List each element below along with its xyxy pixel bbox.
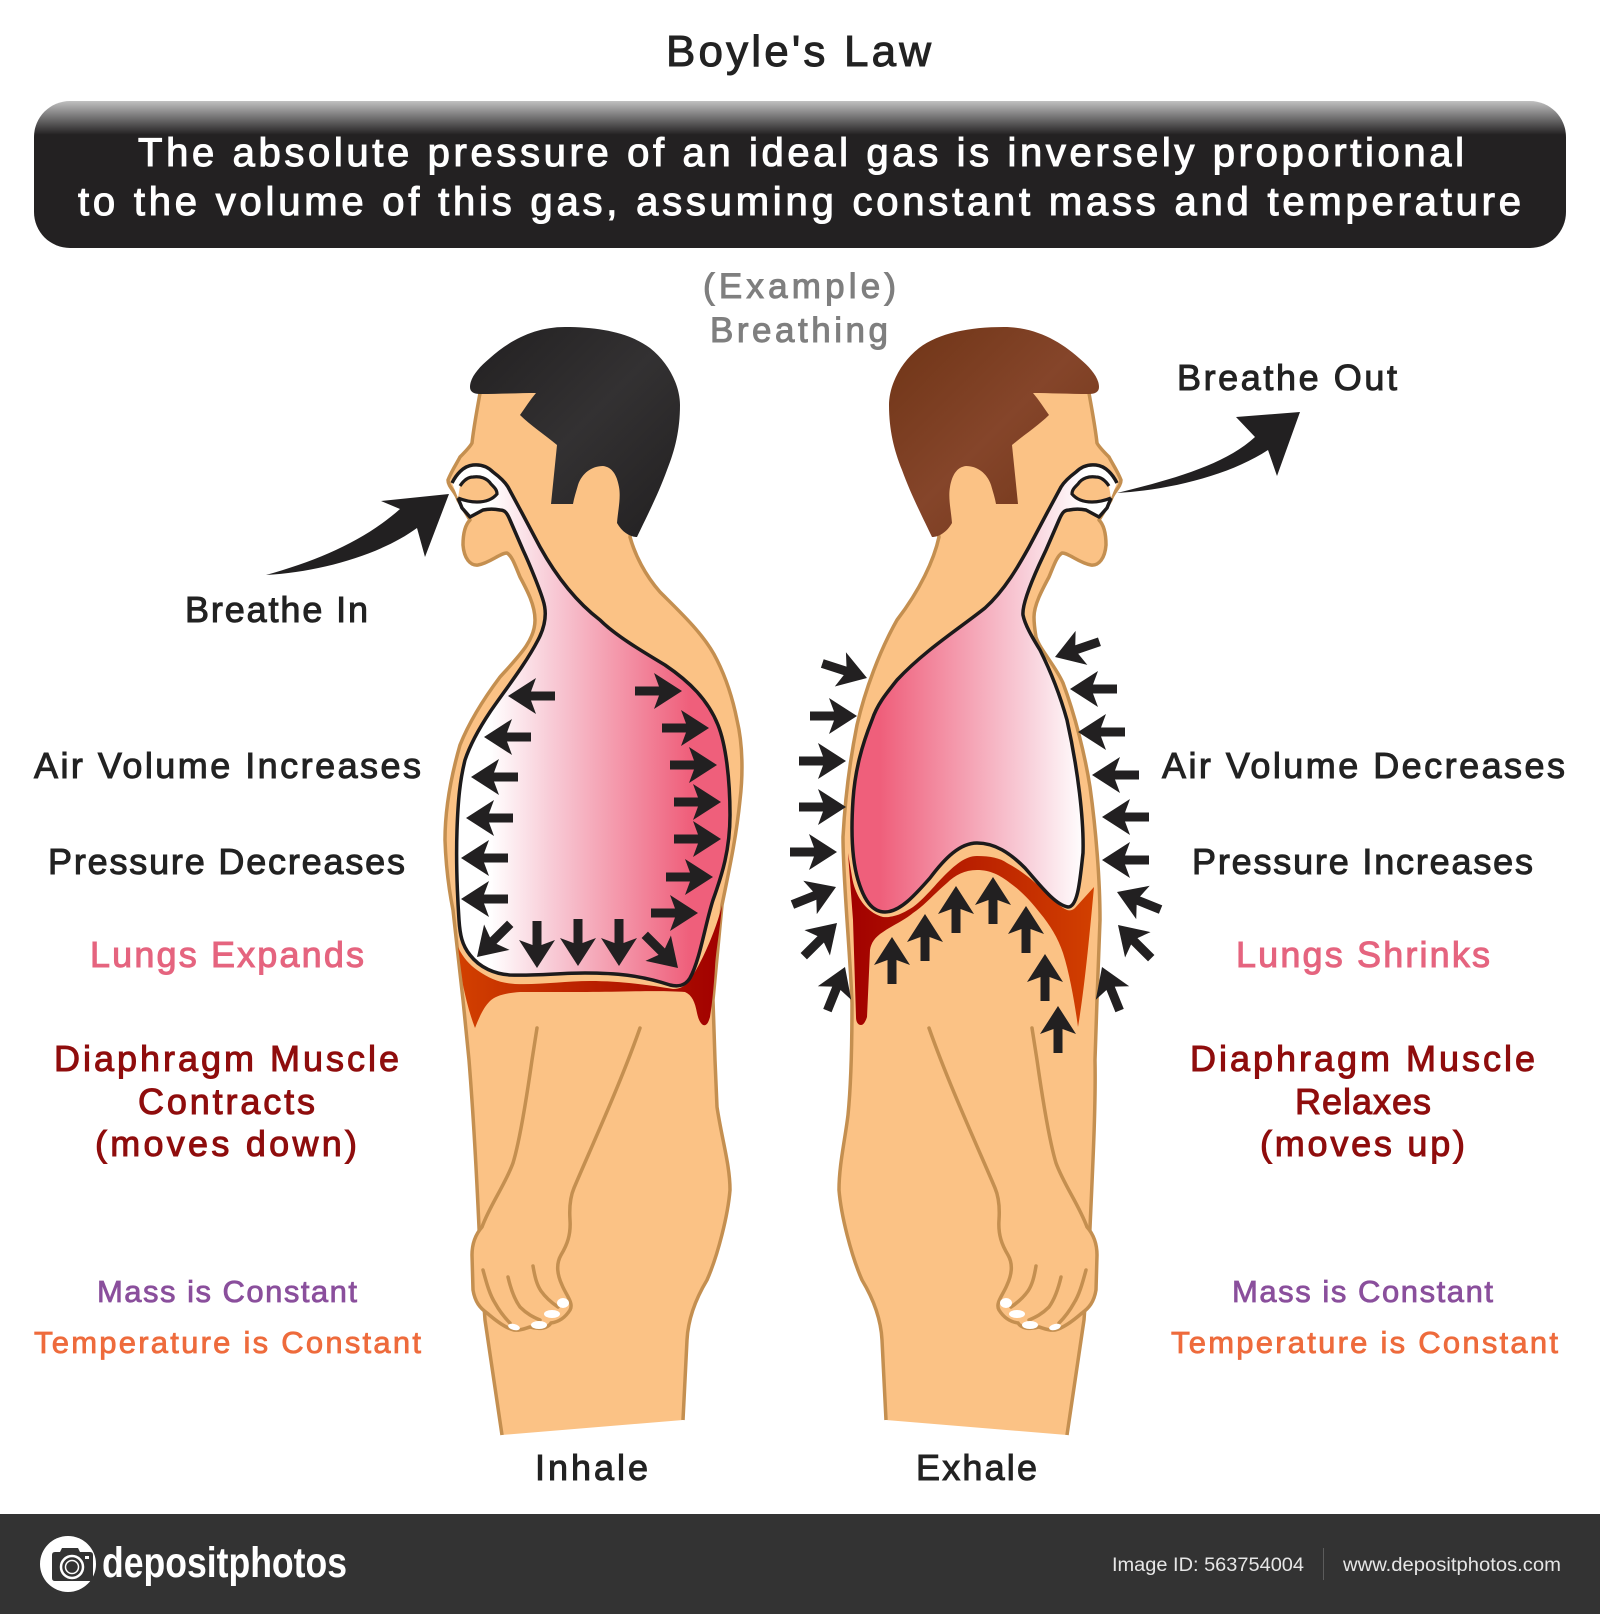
exhale captions (1162, 745, 1565, 1360)
footer logo icon (40, 1536, 96, 1592)
label: breathe out: Breathe Out (1177, 357, 1397, 398)
label: inhale: Inhale (535, 1447, 648, 1488)
left lung and airway (452, 465, 730, 986)
right hair (889, 327, 1099, 537)
exhale captions: Mass is Constant (1232, 1274, 1493, 1309)
exhale captions: Diaphragm Muscle (1190, 1038, 1535, 1079)
inhale captions: Mass is Constant (97, 1274, 357, 1309)
label: exhale: Exhale (916, 1447, 1037, 1488)
website: www.depositphotos.com (1342, 1555, 1561, 1576)
inhale captions: (moves down) (95, 1123, 357, 1164)
exhale captions: Temperature is Constant (1171, 1325, 1558, 1360)
subtitle: example breathing: Breathing (710, 311, 888, 350)
compression arrows (786, 625, 1167, 1053)
figure: inhale (445, 327, 742, 1435)
left body outline (445, 350, 742, 1435)
subtitle: example breathing: (Example) (703, 267, 896, 306)
right body outline (839, 350, 1121, 1435)
footer bar (0, 1514, 1600, 1614)
right arm and hand (929, 1028, 1097, 1331)
definition banner (34, 101, 1566, 248)
right lung and airway (852, 465, 1117, 912)
arrow: breathe in (266, 494, 449, 575)
inhale captions: Lungs Expands (90, 934, 364, 975)
left mouth detail (458, 477, 497, 502)
inhale captions: Air Volume Increases (34, 745, 421, 786)
inhale captions: Pressure Decreases (48, 841, 405, 882)
label: breathe in: Breathe In (185, 589, 368, 630)
left arm and hand (472, 1028, 640, 1331)
title: Boyle's Law (666, 27, 931, 76)
inhale captions: Diaphragm Muscle (54, 1038, 399, 1079)
exhale captions: Lungs Shrinks (1236, 934, 1490, 975)
exhale captions: (moves up) (1260, 1123, 1465, 1164)
inhale captions: Temperature is Constant (34, 1325, 421, 1360)
left diaphragm (458, 905, 722, 1028)
right diaphragm (848, 853, 1094, 1027)
right mouth detail (1072, 477, 1111, 502)
figure: exhale (786, 327, 1167, 1435)
definition banner: to the volume of this gas, assuming constant mass and temperature (78, 180, 1521, 224)
arrow: breathe out (1117, 412, 1300, 493)
footer brand name: depositphotos (102, 1539, 347, 1587)
inhale captions: Contracts (138, 1081, 315, 1122)
expansion arrows (461, 673, 721, 981)
exhale captions: Relaxes (1295, 1081, 1431, 1122)
inhale captions (34, 745, 421, 1360)
image id: Image ID: 563754004 (1112, 1555, 1304, 1576)
exhale captions: Air Volume Decreases (1162, 745, 1565, 786)
left hair (470, 327, 680, 537)
exhale captions: Pressure Increases (1192, 841, 1533, 882)
definition banner: The absolute pressure of an ideal gas is inversely proportional (138, 131, 1464, 175)
subtitle: example breathing (703, 267, 896, 350)
